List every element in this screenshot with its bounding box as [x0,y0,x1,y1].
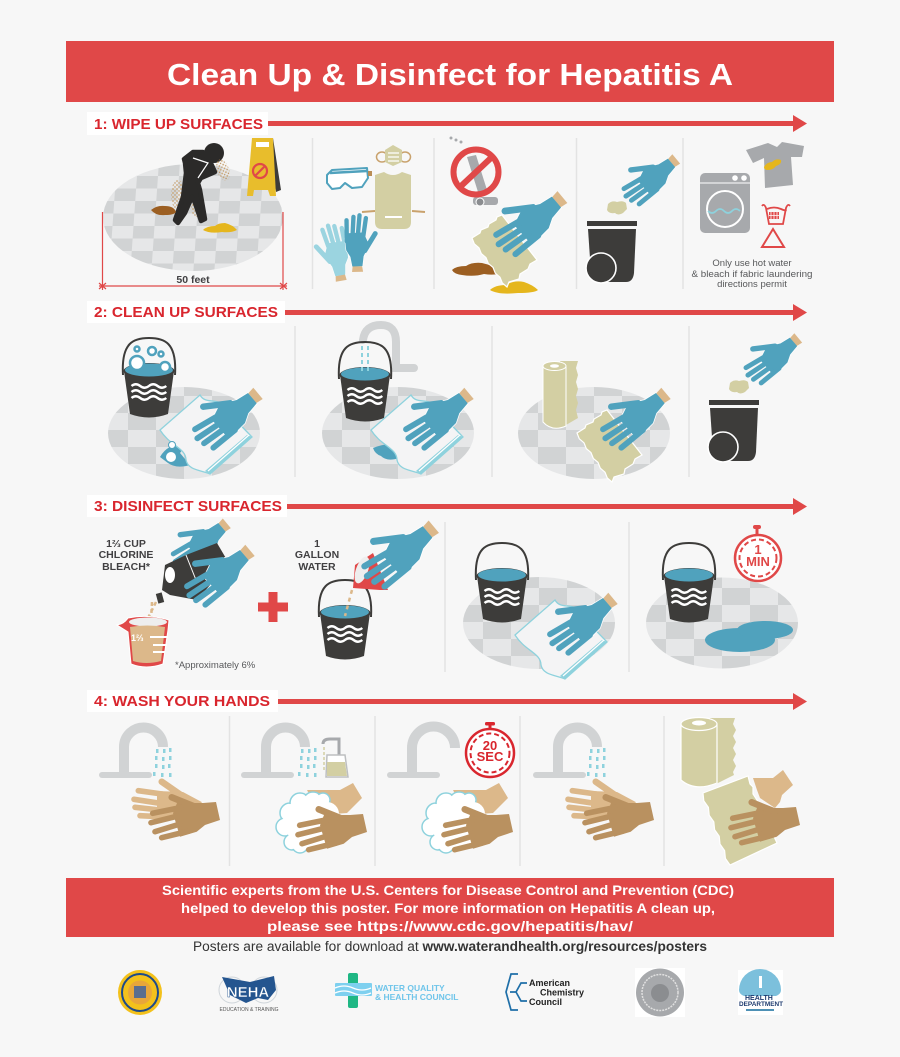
logo: health department [738,969,783,1015]
faucet [363,325,414,368]
panel: laundry [692,142,812,290]
paper towel sheet [703,776,777,865]
logo: health department: HEALTH [745,995,773,1002]
laundry note: directions permit [717,279,787,290]
bleach jug [156,543,227,604]
timer 1 min: MIN [746,554,770,569]
goggles [327,168,372,189]
panel: rinse with clean water [322,325,474,479]
laundry note: & bleach if fabric laundering [692,269,812,280]
50 feet dimension: 50 feet [176,274,210,286]
logo: NEHA: EDUCATION & TRAINING [220,1007,279,1013]
bleach label: CHLORINE [99,549,153,561]
logo: Water Quality & Health Council [335,973,458,1008]
logo: health department: DEPARTMENT [739,1001,783,1008]
heading: step 1 [87,112,807,135]
panel: let stand one minute [646,525,798,668]
footer banner: helped to develop this poster. For more information on Hepatitis A clean up, [181,900,715,916]
logo: American Chemistry Council: Council [529,997,562,1007]
bleach label: BLEACH* [102,561,151,573]
water label: GALLON [295,549,339,561]
panel: dispose paper towels [708,333,802,462]
bleach triangle [762,229,784,247]
heading: step 4: 4: WASH YOUR HANDS [94,693,270,710]
timer 20 sec: 20 [483,738,497,753]
panel: sick person on checkered floor [99,138,287,290]
timer 20 sec [466,722,514,777]
heading: step 4 [87,690,807,712]
heading: step 2: 2: CLEAN UP SURFACES [94,304,278,321]
logo: Water Quality & Health Council: WATER QUALITY [375,983,445,993]
gloves [302,219,370,286]
t-shirt [746,142,804,188]
water label: 1 [314,538,320,550]
logo: county seal [118,970,162,1015]
logo: American Chemistry Council: American [529,978,570,988]
panel: wet hands [102,728,220,838]
heading: step 3: 3: DISINFECT SURFACES [94,498,282,515]
panel: lather with soap [244,728,367,853]
logo: American Chemistry Council [506,974,584,1010]
water label: WATER [298,561,336,573]
paper roll [543,361,578,428]
apron [362,172,425,229]
footer banner: Scientific experts from the U.S. Centers for Disease Control and Prevention (CDC) [162,882,734,898]
laundry basket symbol [762,205,790,224]
panel: measure chlorine bleach [99,519,256,671]
logo: NEHA: NEHA [227,984,269,1001]
logo: city seal [635,968,685,1017]
panel: protective equipment [302,145,425,286]
timer 1 min: 1 [754,542,762,557]
50 feet dimension [99,212,287,290]
panel: dry with paper towels [518,361,671,482]
no vacuum symbol [450,136,498,206]
timer 20 sec: SEC [477,749,504,764]
panel: no vacuum, wipe with paper [450,136,567,294]
panel: dispose in trash [586,154,680,283]
panel: one gallon water [295,520,439,660]
footer banner: please see https://www.cdc.gov/hepatitis/hav/ [267,918,633,934]
panel: wipe with bleach solution [463,543,618,679]
title banner: Clean Up & Disinfect for Hepatitis A [167,57,733,92]
measuring cup: 1⅔ [131,633,144,643]
washing machine [700,173,750,233]
timer 1 min [735,525,781,581]
face mask [376,145,410,166]
pouring cup [352,553,388,590]
heading: step 1: 1: WIPE UP SURFACES [94,116,263,133]
person vomiting [175,143,224,223]
suds in bucket [130,346,170,372]
plus sign [258,592,288,622]
paper roll [681,718,736,787]
panel: dry hands [681,718,800,865]
heading: step 3 [87,495,807,517]
wet floor sign [247,138,281,196]
heading: step 2 [87,301,807,323]
download note: Posters are available for download at www.waterandhealth.org/resources/posters [193,939,707,954]
bleach label: 1⅔ CUP [106,538,146,550]
laundry note: Only use hot water [712,258,792,269]
footnote: *Approximately 6% [175,660,256,671]
title banner [66,41,834,102]
logo: American Chemistry Council: Chemistry [540,988,584,998]
measuring cup [117,616,169,667]
panel: soapy water on floor [108,338,263,479]
footer banner [66,878,834,937]
panel: scrub for 20 seconds [390,722,514,853]
panel: rinse hands [536,728,654,838]
soap dispenser [323,739,348,777]
logo: Water Quality & Health Council: & HEALTH COUNCIL [375,992,458,1002]
logo: NEHA [219,976,279,1013]
